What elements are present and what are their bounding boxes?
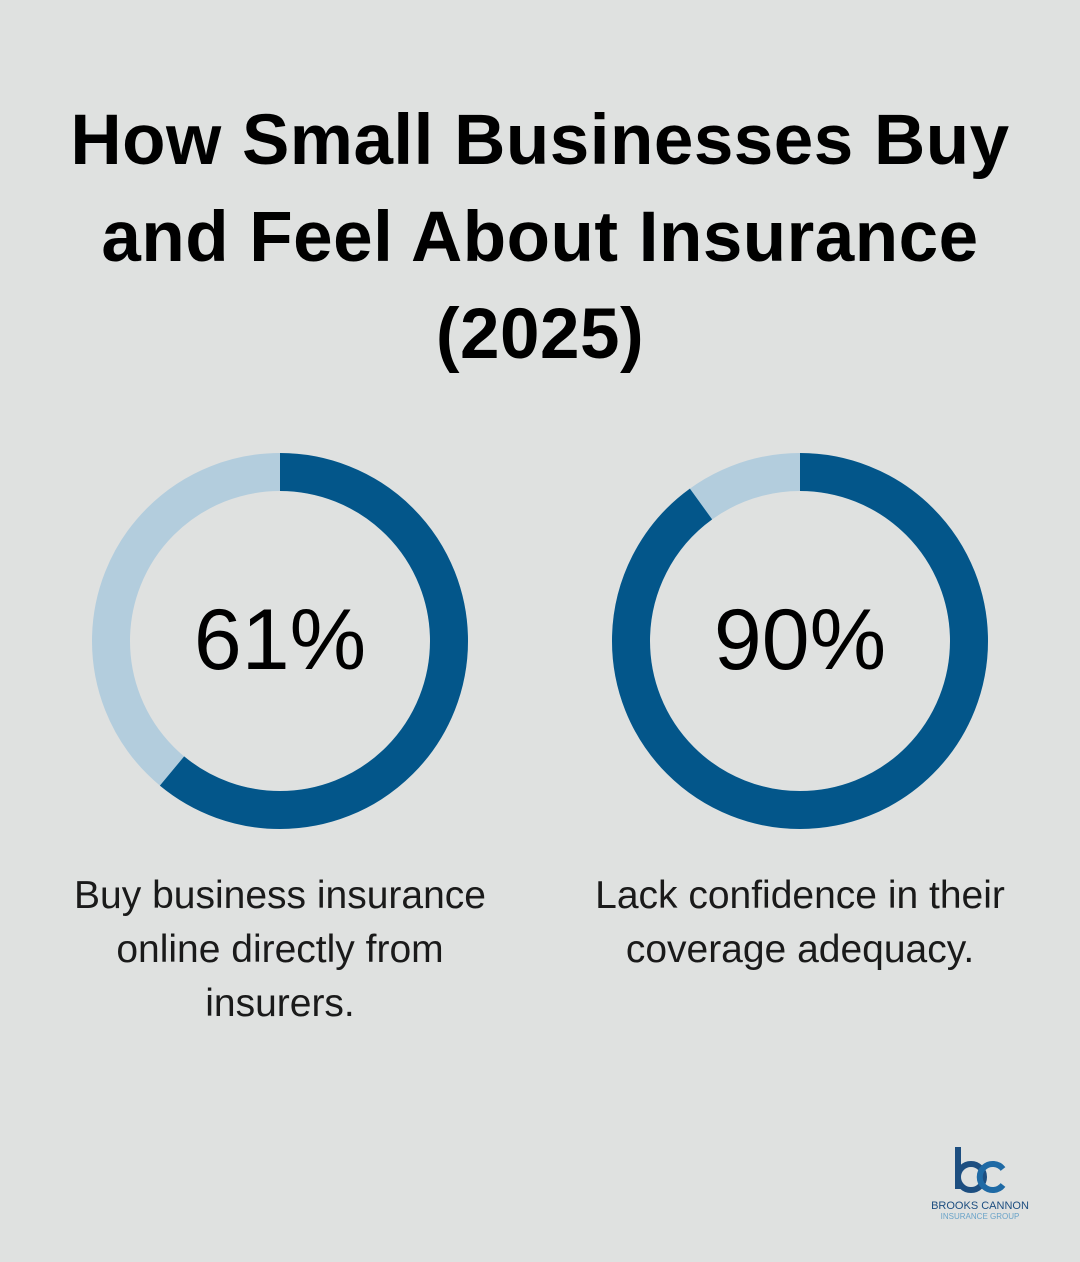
logo: INSURANCE GROUP bbox=[941, 1212, 1019, 1221]
donut chart: 61%: 61% bbox=[194, 592, 366, 688]
title: How Small Businesses Buy bbox=[70, 101, 1010, 180]
caption: 90%: Lack confidence in their coverage adequacy. bbox=[595, 874, 1005, 971]
logo: BROOKS CANNON bbox=[931, 1200, 1029, 1212]
title: and Feel About Insurance bbox=[101, 198, 979, 277]
title: (2025) bbox=[436, 295, 644, 374]
title bbox=[70, 101, 1010, 374]
logo bbox=[931, 1147, 1029, 1221]
caption: 61%: Buy business insurance online directly from insurers. bbox=[74, 874, 486, 1025]
donut chart: 90%: 90% bbox=[714, 592, 886, 688]
